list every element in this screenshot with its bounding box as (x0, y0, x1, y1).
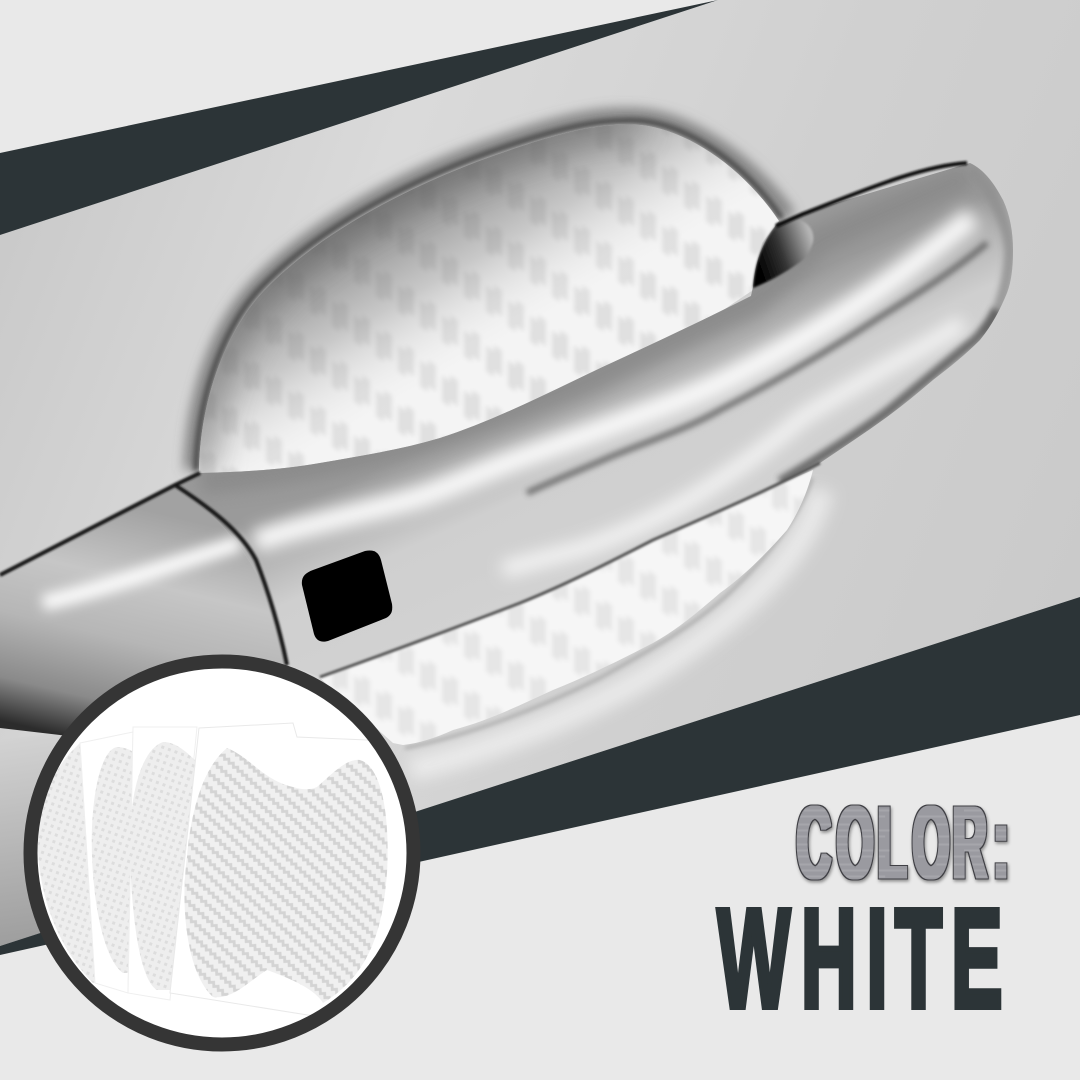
sticker 3 (130, 742, 200, 990)
door surface (0, 0, 1080, 812)
inset circle: sticker sheets (30, 662, 420, 1044)
handle lower edge line (320, 463, 820, 677)
handle groove (527, 243, 987, 493)
base piece of handle (0, 485, 288, 740)
handle end rim (982, 183, 1013, 334)
label: WHITE: WHITE (717, 881, 1003, 1038)
bowl rim dark line (196, 121, 782, 471)
leftmost sticker (38, 743, 95, 983)
white circle (37, 668, 407, 1038)
black key sensor (302, 550, 392, 642)
handle slit (776, 163, 967, 226)
lower dark band (0, 597, 1080, 955)
handle hook recess (753, 220, 813, 288)
sheet 3 (128, 727, 197, 1000)
handle top shadow band (200, 175, 970, 480)
upper carbon sticker (199, 124, 779, 473)
door handle body (175, 163, 1013, 677)
circle ring (30, 662, 414, 1044)
base highlight (43, 543, 240, 603)
lower carbon sticker (320, 470, 813, 745)
handle lower dark edge (780, 310, 997, 482)
sheet 4 front (170, 722, 368, 1016)
handle lower highlight (503, 323, 963, 570)
lower bowl shadow (405, 478, 812, 748)
sticker 2 (92, 747, 132, 973)
upper dark band (0, 0, 718, 235)
label: COLOR: COLOR: (797, 784, 1009, 900)
sheet 2 (80, 732, 133, 993)
base seam lines (0, 473, 287, 665)
lower bowl halo (410, 490, 822, 770)
front carbon sticker (184, 748, 388, 1003)
lower door strip (0, 753, 50, 946)
handle top highlight (255, 217, 973, 542)
bowl rim shadow (190, 114, 790, 470)
